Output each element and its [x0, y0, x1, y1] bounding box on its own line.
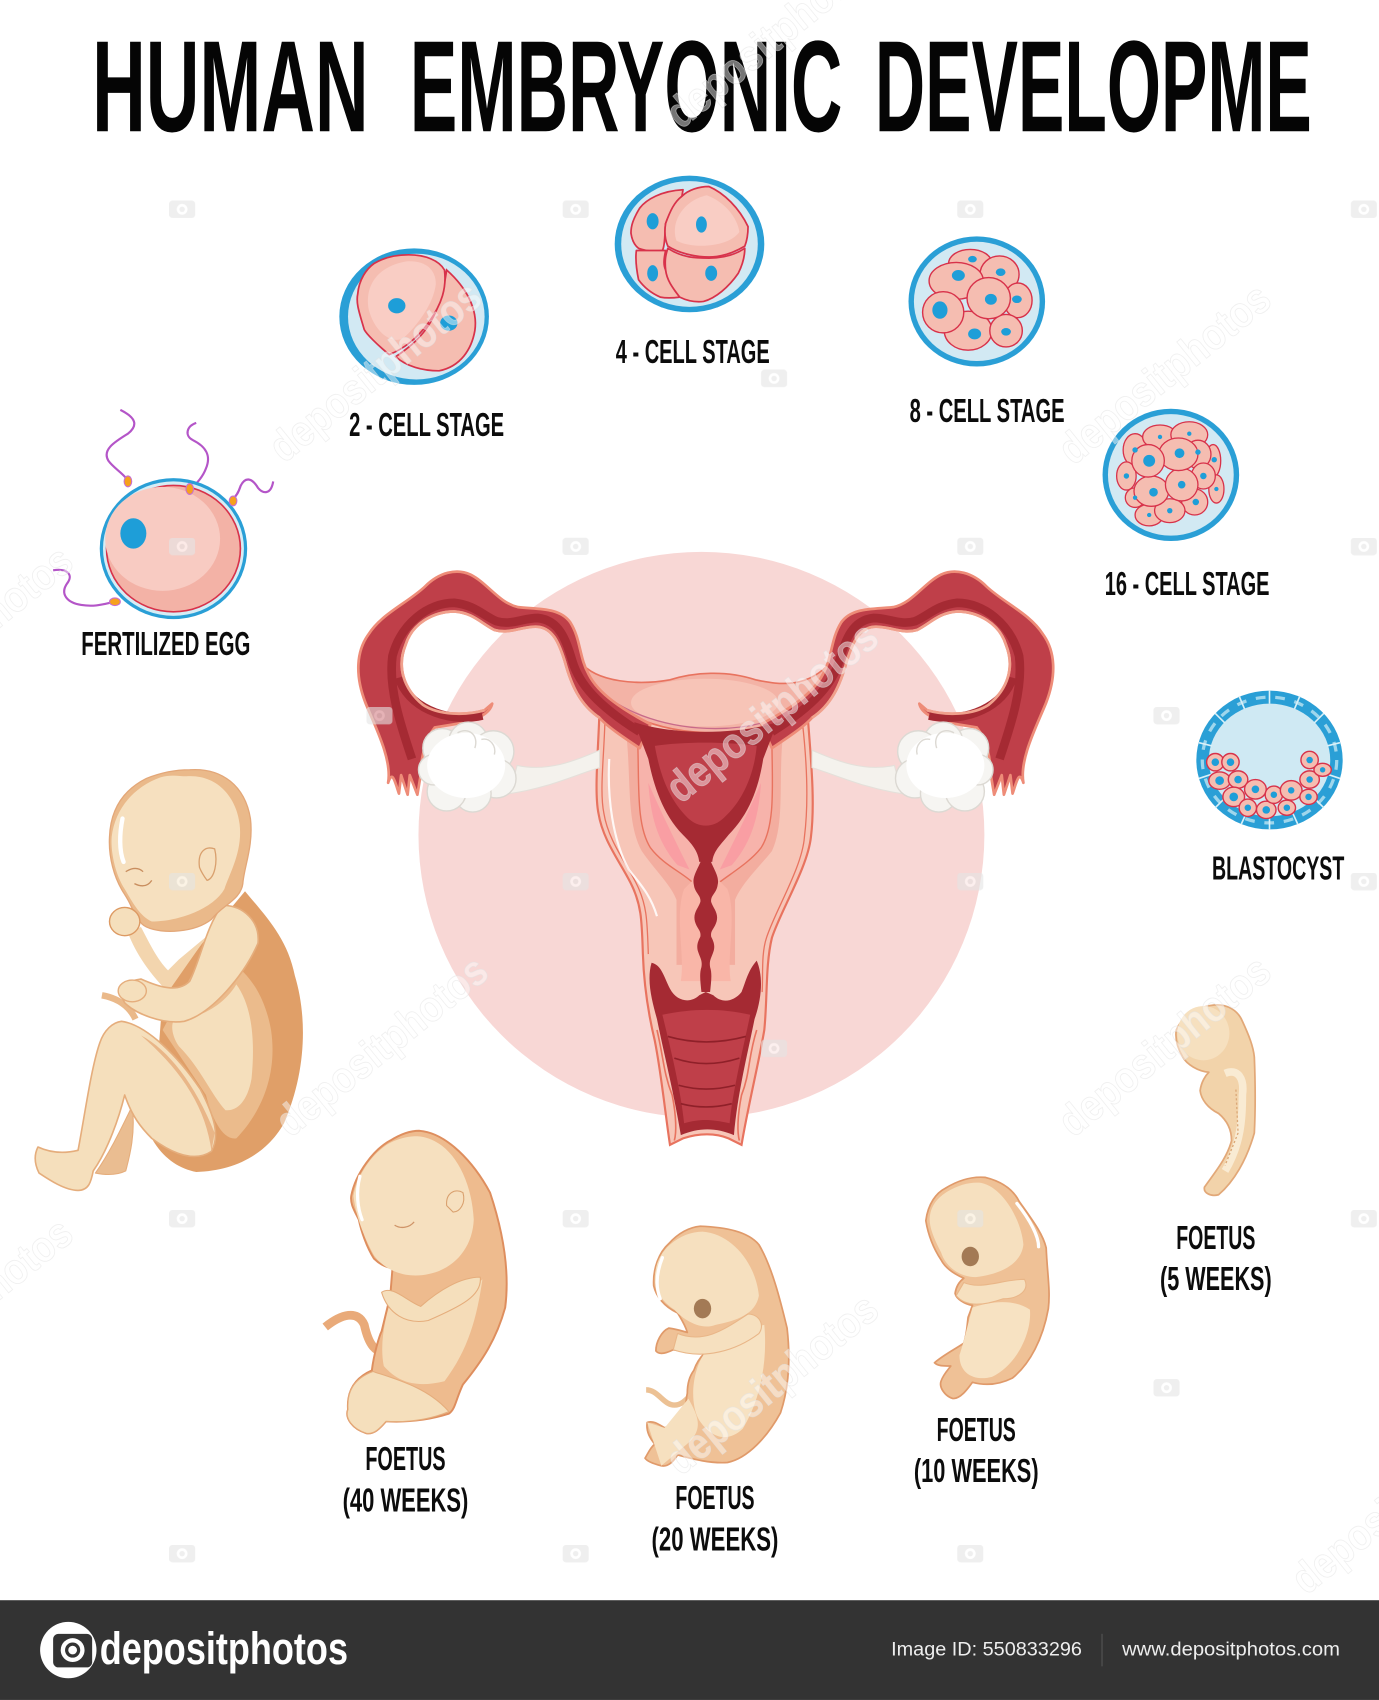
- right fallopian tube and ovary: [761, 572, 1053, 812]
- large foetus (full term): [35, 770, 303, 1190]
- uterus fundus: [580, 661, 832, 733]
- title: HUMAN: [92, 13, 369, 159]
- watermark: depositphotos: [657, 1285, 888, 1484]
- label: foetus 5 weeks: FOETUS: [1176, 1220, 1255, 1257]
- ear: [199, 848, 216, 880]
- pink inner bands: [637, 735, 772, 932]
- sperm heads: [109, 476, 237, 606]
- label: foetus 5 weeks: (5 WEEKS): [1160, 1261, 1272, 1298]
- fertilized egg: [53, 410, 273, 619]
- label: foetus 5 weeks: [1160, 1220, 1272, 1298]
- 16-cell stage: [1103, 409, 1239, 541]
- label: foetus 20 weeks: (20 WEEKS): [652, 1521, 778, 1558]
- watermark: depositphotos: [267, 946, 497, 1146]
- head: [109, 770, 251, 931]
- 4-cell stage: [615, 176, 764, 312]
- ovary: [418, 722, 516, 812]
- foetus 40 weeks: [325, 1131, 507, 1433]
- title: [92, 13, 1312, 159]
- leg: [35, 1021, 216, 1190]
- 2-cell stage: [339, 248, 489, 385]
- watermark: depositphotos: [1049, 946, 1280, 1146]
- foetus 20 weeks: [645, 1226, 789, 1466]
- uterine wall inner line: [602, 721, 807, 992]
- label: 2-cell stage: 2 - CELL STAGE: [349, 407, 504, 444]
- far arm: [128, 927, 211, 992]
- label: foetus 20 weeks: [652, 1480, 778, 1558]
- closed eye: [126, 868, 152, 886]
- hands: [109, 907, 140, 936]
- icon: camera logo: [40, 1622, 96, 1678]
- sperm tails: [53, 410, 273, 606]
- label: 16-cell stage: 16 - CELL STAGE: [1105, 566, 1270, 603]
- inner cervix walls: [680, 867, 732, 981]
- blastocyst: [1196, 691, 1343, 829]
- left fallopian tube and ovary: [358, 572, 650, 812]
- label: 4-cell stage: 4 - CELL STAGE: [616, 334, 770, 371]
- background circle: [418, 552, 984, 1118]
- torso: [152, 891, 303, 1172]
- label: 8-cell stage: 8 - CELL STAGE: [910, 393, 1065, 430]
- 8-cell stage: [908, 236, 1045, 366]
- muscle layer around cavity: [627, 737, 783, 965]
- vagina: [649, 961, 761, 1141]
- uterine cavity: [634, 722, 777, 862]
- footer image id: Image ID: 550833296: [891, 1639, 1082, 1661]
- cord: [646, 1390, 690, 1405]
- label: foetus 40 weeks: FOETUS: [365, 1441, 446, 1478]
- watermark: depositphotos: [1049, 274, 1280, 474]
- footer website: www.depositphotos.com: [1121, 1639, 1340, 1661]
- footer bar: [0, 1600, 1379, 1700]
- cord: [325, 1315, 392, 1355]
- label: foetus 10 weeks: FOETUS: [937, 1412, 1016, 1449]
- back foot: [95, 1106, 133, 1174]
- foetus 10 weeks: [926, 1177, 1049, 1399]
- watermark: depositphotos: [657, 613, 888, 812]
- wall highlight: [609, 759, 657, 916]
- label: foetus 10 weeks: (10 WEEKS): [914, 1453, 1039, 1490]
- label: foetus 10 weeks: [914, 1412, 1039, 1490]
- near arm: [122, 905, 258, 1022]
- foetus 5 weeks: [1176, 1005, 1255, 1195]
- label: foetus 20 weeks: FOETUS: [675, 1480, 755, 1517]
- uterus diagram: [358, 572, 1053, 1145]
- label: fertilized egg: FERTILIZED EGG: [81, 626, 250, 663]
- label: foetus 40 weeks: [343, 1441, 468, 1519]
- uterus body: [597, 694, 813, 1145]
- nucleus: [120, 518, 146, 549]
- label: foetus 40 weeks: (40 WEEKS): [343, 1482, 468, 1519]
- watermark: depositphotos: [260, 272, 491, 472]
- title: EMBRYONIC: [410, 13, 842, 159]
- cervical canal: [693, 857, 718, 992]
- footer logo text: depositphotos: [100, 1623, 348, 1674]
- umbilical cord: [102, 995, 136, 1019]
